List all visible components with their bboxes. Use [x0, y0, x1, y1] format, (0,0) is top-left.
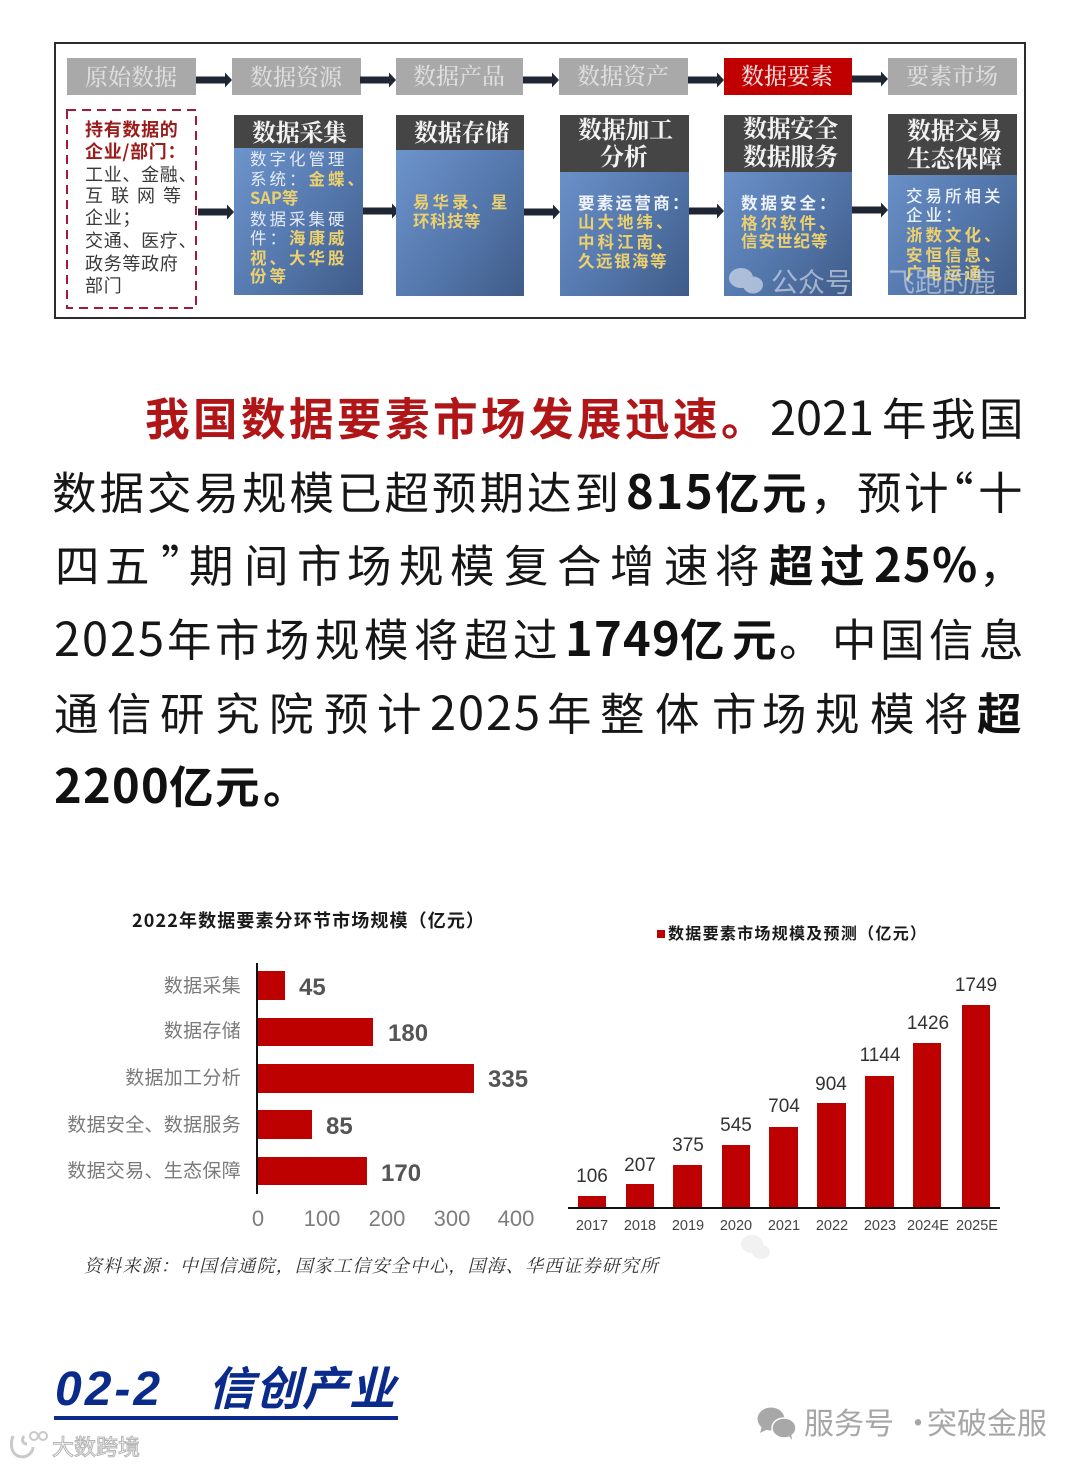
- line 3: ，: [979, 530, 1024, 595]
- dashed box: data holders: 交通、医疗、: [85, 227, 197, 253]
- section heading: 02-2 信创产业: 02-2: [55, 1363, 163, 1416]
- dashed box: data holders: 互联网等: [85, 182, 182, 208]
- stage: 数据资源: 数据资源: [250, 59, 343, 92]
- section heading: 02-2 信创产业: [54, 1353, 400, 1420]
- columns: [578, 1005, 990, 1208]
- chart: market size and forecast column chart: [568, 920, 1000, 1234]
- value labels: 85: [326, 1113, 353, 1140]
- column: 数据安全数据服务: 格尔软件、: [741, 210, 838, 234]
- line 3: 超过: [769, 530, 865, 595]
- column: 数据采集: 视、大华股: [250, 245, 348, 269]
- arrows: bottom row: [198, 202, 888, 220]
- category labels: 数据采集: [164, 971, 241, 998]
- x axis ticks: 100: [304, 1206, 340, 1231]
- value labels: 180: [388, 1020, 428, 1047]
- line 4: 1749: [565, 601, 680, 670]
- column: 数据加工分析: [560, 110, 691, 296]
- x axis ticks: 300: [434, 1206, 470, 1231]
- column: 数据安全数据服务: 数据安全：: [741, 190, 838, 214]
- column values: 545: [720, 1115, 752, 1136]
- column: 数据加工分析: 山大地纬、: [578, 209, 676, 233]
- column: 数据加工分析: 分析: [600, 137, 648, 172]
- section heading: 02-2 信创产业: 信创产业: [208, 1353, 400, 1419]
- year labels: 2022: [816, 1218, 848, 1234]
- column: 数据安全数据服务: [724, 109, 852, 296]
- value labels: [299, 974, 528, 1187]
- line 4: 亿元: [680, 604, 777, 669]
- line 6: 2200: [54, 748, 169, 817]
- category labels: 数据安全、数据服务: [67, 1110, 241, 1137]
- column values: [576, 975, 997, 1187]
- x axis ticks: 200: [369, 1206, 405, 1231]
- column: 数据加工分析: 中科江南、: [578, 229, 676, 253]
- column: 数据交易生态保障: 交易所相关: [906, 183, 1004, 207]
- baseline: [568, 1207, 1000, 1209]
- year labels: 2018: [624, 1218, 656, 1234]
- column: 数据加工分析: 要素运营商：: [578, 190, 691, 214]
- line 4: 2025: [54, 601, 164, 670]
- stage: 要素市场: [888, 58, 1017, 95]
- column: 数据交易生态保障: [888, 111, 1017, 295]
- column: 数据安全数据服务: 信安世纪等: [741, 228, 828, 252]
- year labels: 2023: [864, 1218, 896, 1234]
- chart title: 2022年数据要素分环节市场规模（亿元）: [132, 907, 484, 933]
- column values: 375: [672, 1135, 704, 1156]
- column: 数据采集: 份等: [250, 263, 289, 287]
- column values: 1144: [860, 1045, 901, 1066]
- year labels: 2020: [720, 1218, 752, 1234]
- column values: 106: [576, 1166, 608, 1187]
- arrows: top row: [196, 72, 888, 88]
- watermark: 公众号 飞跑的鹿: 公众号: [771, 261, 852, 300]
- line 5: 年整体市场规模将: [547, 678, 969, 743]
- column: 数据交易生态保障: 广电运通: [906, 260, 984, 284]
- watermark: 大数跨境: [11, 1430, 140, 1462]
- column: 数据采集: [234, 113, 367, 295]
- dashed box: data holders: 政务等政府: [85, 250, 178, 276]
- stage: 数据资源: [232, 58, 361, 95]
- column values: 1749: [955, 975, 997, 996]
- value labels: 335: [488, 1066, 528, 1093]
- column: 数据采集: 数据采集硬: [250, 206, 348, 230]
- column: 数据交易生态保障: 安恒信息、: [906, 242, 1004, 266]
- year labels: 2024E: [907, 1218, 949, 1234]
- line 6: 亿元。: [169, 751, 308, 816]
- column: 数据采集: 数字化管理: [250, 146, 348, 170]
- legend and title: 数据要素市场规模及预测（亿元）: [668, 920, 926, 944]
- watermark: 大数跨境: 大数跨境: [52, 1430, 140, 1462]
- stage: 原始数据: 原始数据: [85, 59, 177, 92]
- line 1: 2021: [770, 380, 874, 449]
- column: 数据交易生态保障: 生态保障: [907, 139, 1002, 174]
- watermark: 服务号 突破金服: ·: [903, 1399, 933, 1443]
- column: 数据交易生态保障: 数据交易: [907, 111, 1002, 146]
- line 1: 我国数据要素市场发展迅速。: [145, 383, 766, 448]
- dashed box: data holders: 企业；: [85, 204, 141, 230]
- watermark: 公众号 飞跑的鹿: [729, 261, 996, 300]
- line 3: 四五”期间市场规模复合增速将: [55, 530, 760, 595]
- x axis ticks: [252, 1206, 534, 1231]
- stage: 数据产品: 数据产品: [413, 58, 505, 91]
- column: 数据加工分析: 久远银海等: [578, 248, 668, 272]
- column: 数据采集: 系统：金蝶、: [250, 166, 367, 190]
- line 1: 年我国: [882, 383, 1024, 448]
- panel: data value chain diagram: [55, 43, 1025, 318]
- value labels: 45: [299, 974, 326, 1001]
- axis line: [256, 963, 258, 1194]
- line 3: 25%: [874, 527, 977, 596]
- x axis ticks: 400: [498, 1206, 534, 1231]
- column: 数据交易生态保障: 企业：: [906, 202, 964, 226]
- year labels: 2025E: [956, 1218, 998, 1234]
- line 4: 年市场规模将超过: [167, 604, 558, 669]
- column: 数据采集: SAP等: [250, 185, 298, 209]
- value labels: 170: [381, 1160, 421, 1187]
- stage: 数据资产: [559, 58, 688, 95]
- stage: 原始数据: [67, 58, 196, 95]
- dashed box: data holders: 持有数据的: [85, 116, 178, 142]
- column values: 704: [768, 1096, 800, 1117]
- source note: 资料来源：中国信通院，国家工信安全中心，国海、华西证券研究所: [84, 1252, 661, 1278]
- watermark: 服务号 突破金服: 突破金服: [927, 1399, 1047, 1443]
- column: 数据存储: 易华录、星: [413, 189, 510, 213]
- line 2: 数据交易规模已超预期达到: [52, 457, 619, 522]
- stage: 要素市场: 要素市场: [906, 58, 998, 91]
- column: 数据加工分析: 数据加工: [578, 110, 673, 145]
- x axis ticks: 0: [252, 1206, 264, 1231]
- bars: [257, 971, 474, 1185]
- stage: 数据要素 highlighted: 数据要素: [741, 58, 833, 91]
- stage: 数据要素 highlighted: [724, 58, 852, 95]
- line 2: ，预计“十: [810, 457, 1023, 522]
- chart: 2022 segment market size bar chart: [67, 907, 534, 1231]
- category labels: 数据加工分析: [125, 1063, 241, 1090]
- year labels: [576, 1218, 998, 1234]
- dashed box: data holders: 企业/部门：: [85, 138, 186, 164]
- paragraph: market growth text: [52, 380, 1024, 817]
- column: 数据存储: 环科技等: [413, 208, 481, 232]
- watermark: 服务号 突破金服: [758, 1399, 1047, 1443]
- dashed box: data holders: 工业、金融、: [85, 161, 197, 187]
- line 2: 亿元: [715, 457, 807, 522]
- line 5: 2025: [430, 675, 540, 744]
- column: 数据采集: 数据采集: [252, 113, 347, 148]
- column values: 207: [624, 1155, 656, 1176]
- category labels: 数据存储: [164, 1016, 241, 1043]
- stage: 数据产品: [396, 58, 523, 95]
- column values: 904: [815, 1074, 847, 1095]
- watermark: 服务号 突破金服: 服务号: [804, 1399, 894, 1443]
- category labels: [67, 971, 241, 1183]
- column: 数据存储: [396, 113, 524, 296]
- column: 数据交易生态保障: 浙数文化、: [906, 222, 1004, 246]
- line 5: 通信研究院预计: [54, 678, 422, 743]
- year labels: 2021: [768, 1218, 800, 1234]
- line 5: 超: [977, 678, 1022, 743]
- watermark: 公众号 飞跑的鹿: 飞跑的鹿: [888, 261, 996, 300]
- line 2: 815: [626, 454, 713, 523]
- line 4: 。中国信息: [779, 604, 1024, 669]
- year labels: 2019: [672, 1218, 704, 1234]
- column values: 1426: [907, 1013, 949, 1034]
- column: 数据存储: 数据存储: [414, 113, 509, 148]
- year labels: 2017: [576, 1218, 608, 1234]
- category labels: 数据交易、生态保障: [67, 1156, 241, 1183]
- column: 数据安全数据服务: 数据安全: [743, 109, 838, 144]
- icon: faint wechat watermark: [741, 1235, 770, 1259]
- stage: 数据资产: 数据资产: [577, 58, 669, 91]
- column: 数据采集: 件：海康威: [250, 225, 348, 249]
- dashed box: data holders: 部门: [85, 272, 122, 298]
- column: 数据安全数据服务: 数据服务: [743, 137, 838, 172]
- dashed box: data holders: [67, 110, 197, 308]
